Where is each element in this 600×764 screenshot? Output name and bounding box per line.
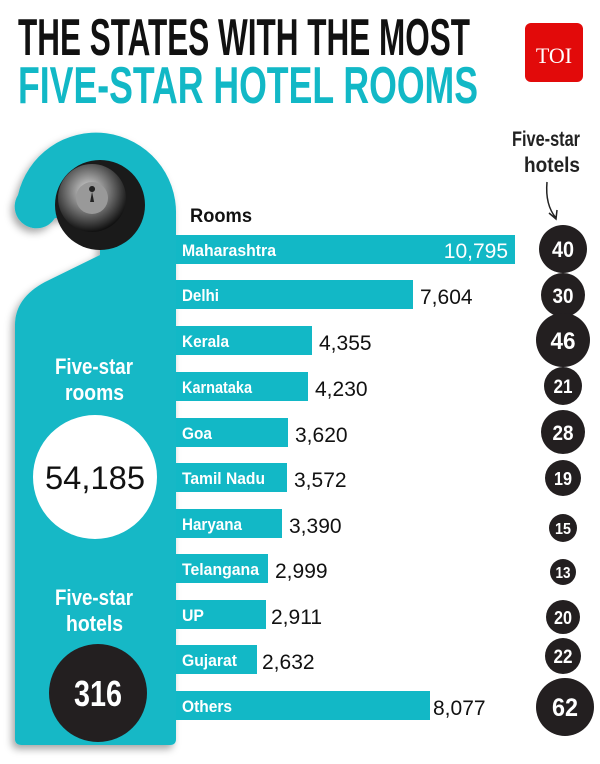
bar chart: 7,604 xyxy=(420,286,473,309)
bar chart: Karnataka xyxy=(182,378,252,397)
hotel count circles: 15 xyxy=(555,521,571,538)
bar chart: Kerala xyxy=(182,332,229,351)
header: Rooms: Rooms xyxy=(190,206,252,227)
bar chart: 4,230 xyxy=(315,378,368,401)
hotel count circles: 22 xyxy=(554,647,572,668)
hotel count circles: 46 xyxy=(550,328,576,355)
bar chart: 2,632 xyxy=(262,651,315,674)
bar chart: 8,077 xyxy=(433,697,486,720)
bar chart: UP xyxy=(182,606,204,625)
hotel count circles: 40 xyxy=(552,237,574,262)
hotel count circles: 62 xyxy=(552,694,578,722)
bar chart xyxy=(176,235,515,720)
total hotels circle xyxy=(49,644,147,742)
title xyxy=(18,9,478,115)
icon: door knob xyxy=(55,160,145,250)
label: five-star rooms: rooms xyxy=(65,380,124,405)
bar chart: Goa xyxy=(182,424,212,443)
door hanger panel xyxy=(15,133,176,745)
label: five-star rooms: Five-star xyxy=(55,354,133,379)
total rooms circle: 54,185 xyxy=(45,460,145,496)
total hotels circle: 316 xyxy=(74,673,122,714)
bar chart: 10,795 xyxy=(444,240,508,263)
hotel count circles: 30 xyxy=(552,285,574,308)
bar chart: Others xyxy=(182,697,232,716)
arrow xyxy=(547,182,557,219)
bar chart: Tamil Nadu xyxy=(182,469,265,488)
bar chart: 3,620 xyxy=(295,424,348,447)
label: five-star hotels: Five-star xyxy=(55,585,133,610)
label: five-star hotels xyxy=(55,585,133,636)
bar chart: 2,911 xyxy=(271,606,322,629)
bar chart: 3,572 xyxy=(294,469,347,492)
header: five-star hotels: Five-star xyxy=(512,128,580,151)
hotel count circles: 21 xyxy=(554,377,573,398)
hotel count circles xyxy=(536,225,594,736)
bar chart: Maharashtra xyxy=(182,241,276,260)
total rooms circle xyxy=(33,415,157,539)
hotel count circles: 13 xyxy=(556,565,571,582)
bar chart: Telangana xyxy=(182,560,259,579)
hotel count circles: 20 xyxy=(554,608,572,628)
hotel count circles: 28 xyxy=(552,422,574,445)
label: five-star rooms xyxy=(55,354,133,405)
label: five-star hotels: hotels xyxy=(66,611,123,636)
hotel count circles: 19 xyxy=(554,469,572,489)
bar chart: 3,390 xyxy=(289,515,342,538)
bar chart: Delhi xyxy=(182,286,219,305)
header: five-star hotels: hotels xyxy=(524,154,580,177)
bar chart: 4,355 xyxy=(319,332,372,355)
bar chart: Gujarat xyxy=(182,651,237,670)
bar chart: Haryana xyxy=(182,515,242,534)
bar chart: 2,999 xyxy=(275,560,328,583)
logo: TOI: TOI xyxy=(536,43,572,68)
header: five-star hotels xyxy=(512,128,580,219)
logo: TOI xyxy=(525,23,583,82)
